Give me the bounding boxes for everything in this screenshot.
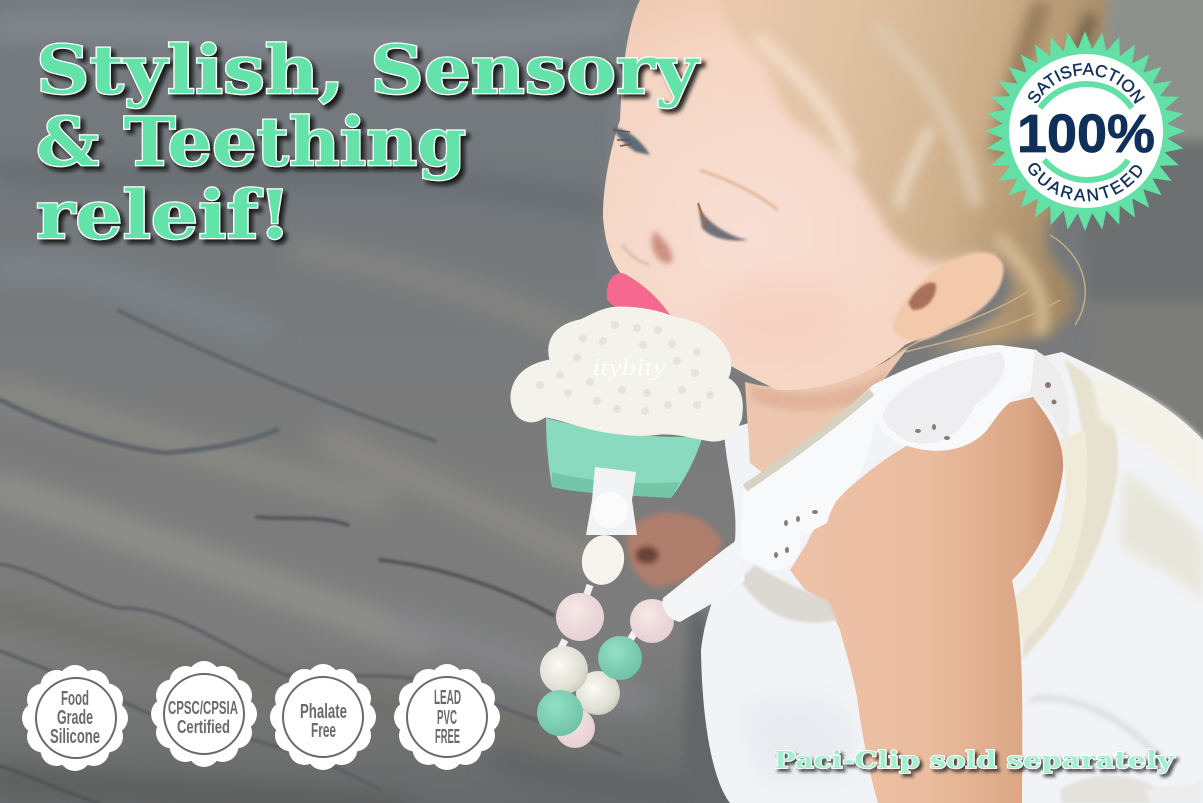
badge: food grade silicone: Grade: [57, 707, 93, 729]
white disc: [1009, 54, 1163, 208]
title: & Teething: [36, 103, 466, 181]
baby: ruffled shoulder strap: [740, 345, 1069, 623]
baby: dress: [701, 352, 1203, 803]
pink bead right: [630, 599, 674, 643]
brand mark: itybity: [592, 355, 666, 381]
badge: food grade silicone: [22, 665, 128, 771]
paci clip: [662, 540, 745, 622]
white oval bead: [577, 531, 629, 589]
strap and snap: [586, 467, 637, 535]
mint cupcake base: [546, 418, 703, 498]
pink bead left: [556, 593, 604, 641]
badge: food grade silicone: Silicone: [50, 726, 100, 748]
product: cupcake teether with clip and beads: [511, 273, 745, 748]
seal text top: SATISFACTION: [1028, 63, 1145, 104]
mint arcs: [1040, 84, 1132, 108]
badge: CPSC/CPSIA certified: [151, 661, 257, 767]
baby: chest and neck: [745, 345, 910, 473]
pearl bead left: [540, 646, 588, 694]
mint bead lower: [537, 690, 583, 736]
baby: face: [603, 0, 1000, 390]
white cupcake frosting: [511, 307, 742, 441]
baby: hair: [716, 0, 1112, 358]
title: releif!: [36, 176, 291, 254]
mint starburst: [985, 31, 1185, 231]
badge: food grade silicone: Food: [61, 688, 89, 710]
pearl bead low: [576, 671, 620, 715]
caption: paci-clip sold separately: Paci-Clip sold separately: [774, 747, 1175, 774]
mint bead upper: [598, 636, 642, 680]
title: Stylish, Sensory: [36, 31, 700, 109]
badge: lead pvc free: PVC: [437, 707, 457, 729]
badge: phalate free: Free: [311, 720, 336, 742]
baby's blurred hand behind the toy: [628, 512, 722, 587]
badge: phalate free: [270, 664, 376, 770]
pink teether tip: [607, 273, 670, 315]
badge: CPSC/CPSIA certified: Certified: [177, 717, 230, 737]
pink bead lower: [555, 708, 595, 748]
satisfaction guarantee seal: [985, 31, 1185, 231]
seal text bottom: GUARANTEED: [1028, 163, 1142, 202]
bead cords: [560, 585, 635, 695]
badge: lead pvc free: FREE: [435, 726, 460, 748]
badge: lead pvc free: LEAD: [434, 687, 461, 709]
badge: CPSC/CPSIA certified: CPSC/CPSIA: [168, 698, 238, 718]
title: [36, 31, 700, 254]
seal number: 100%: [1017, 104, 1155, 164]
badge: lead pvc free: [394, 664, 500, 770]
baby: arm: [790, 397, 1063, 803]
baby: eyes, nose and cheek: [612, 127, 850, 365]
badge: phalate free: Phalate: [300, 701, 347, 723]
frosting dots: [536, 321, 714, 415]
baby: ear: [893, 253, 1004, 341]
